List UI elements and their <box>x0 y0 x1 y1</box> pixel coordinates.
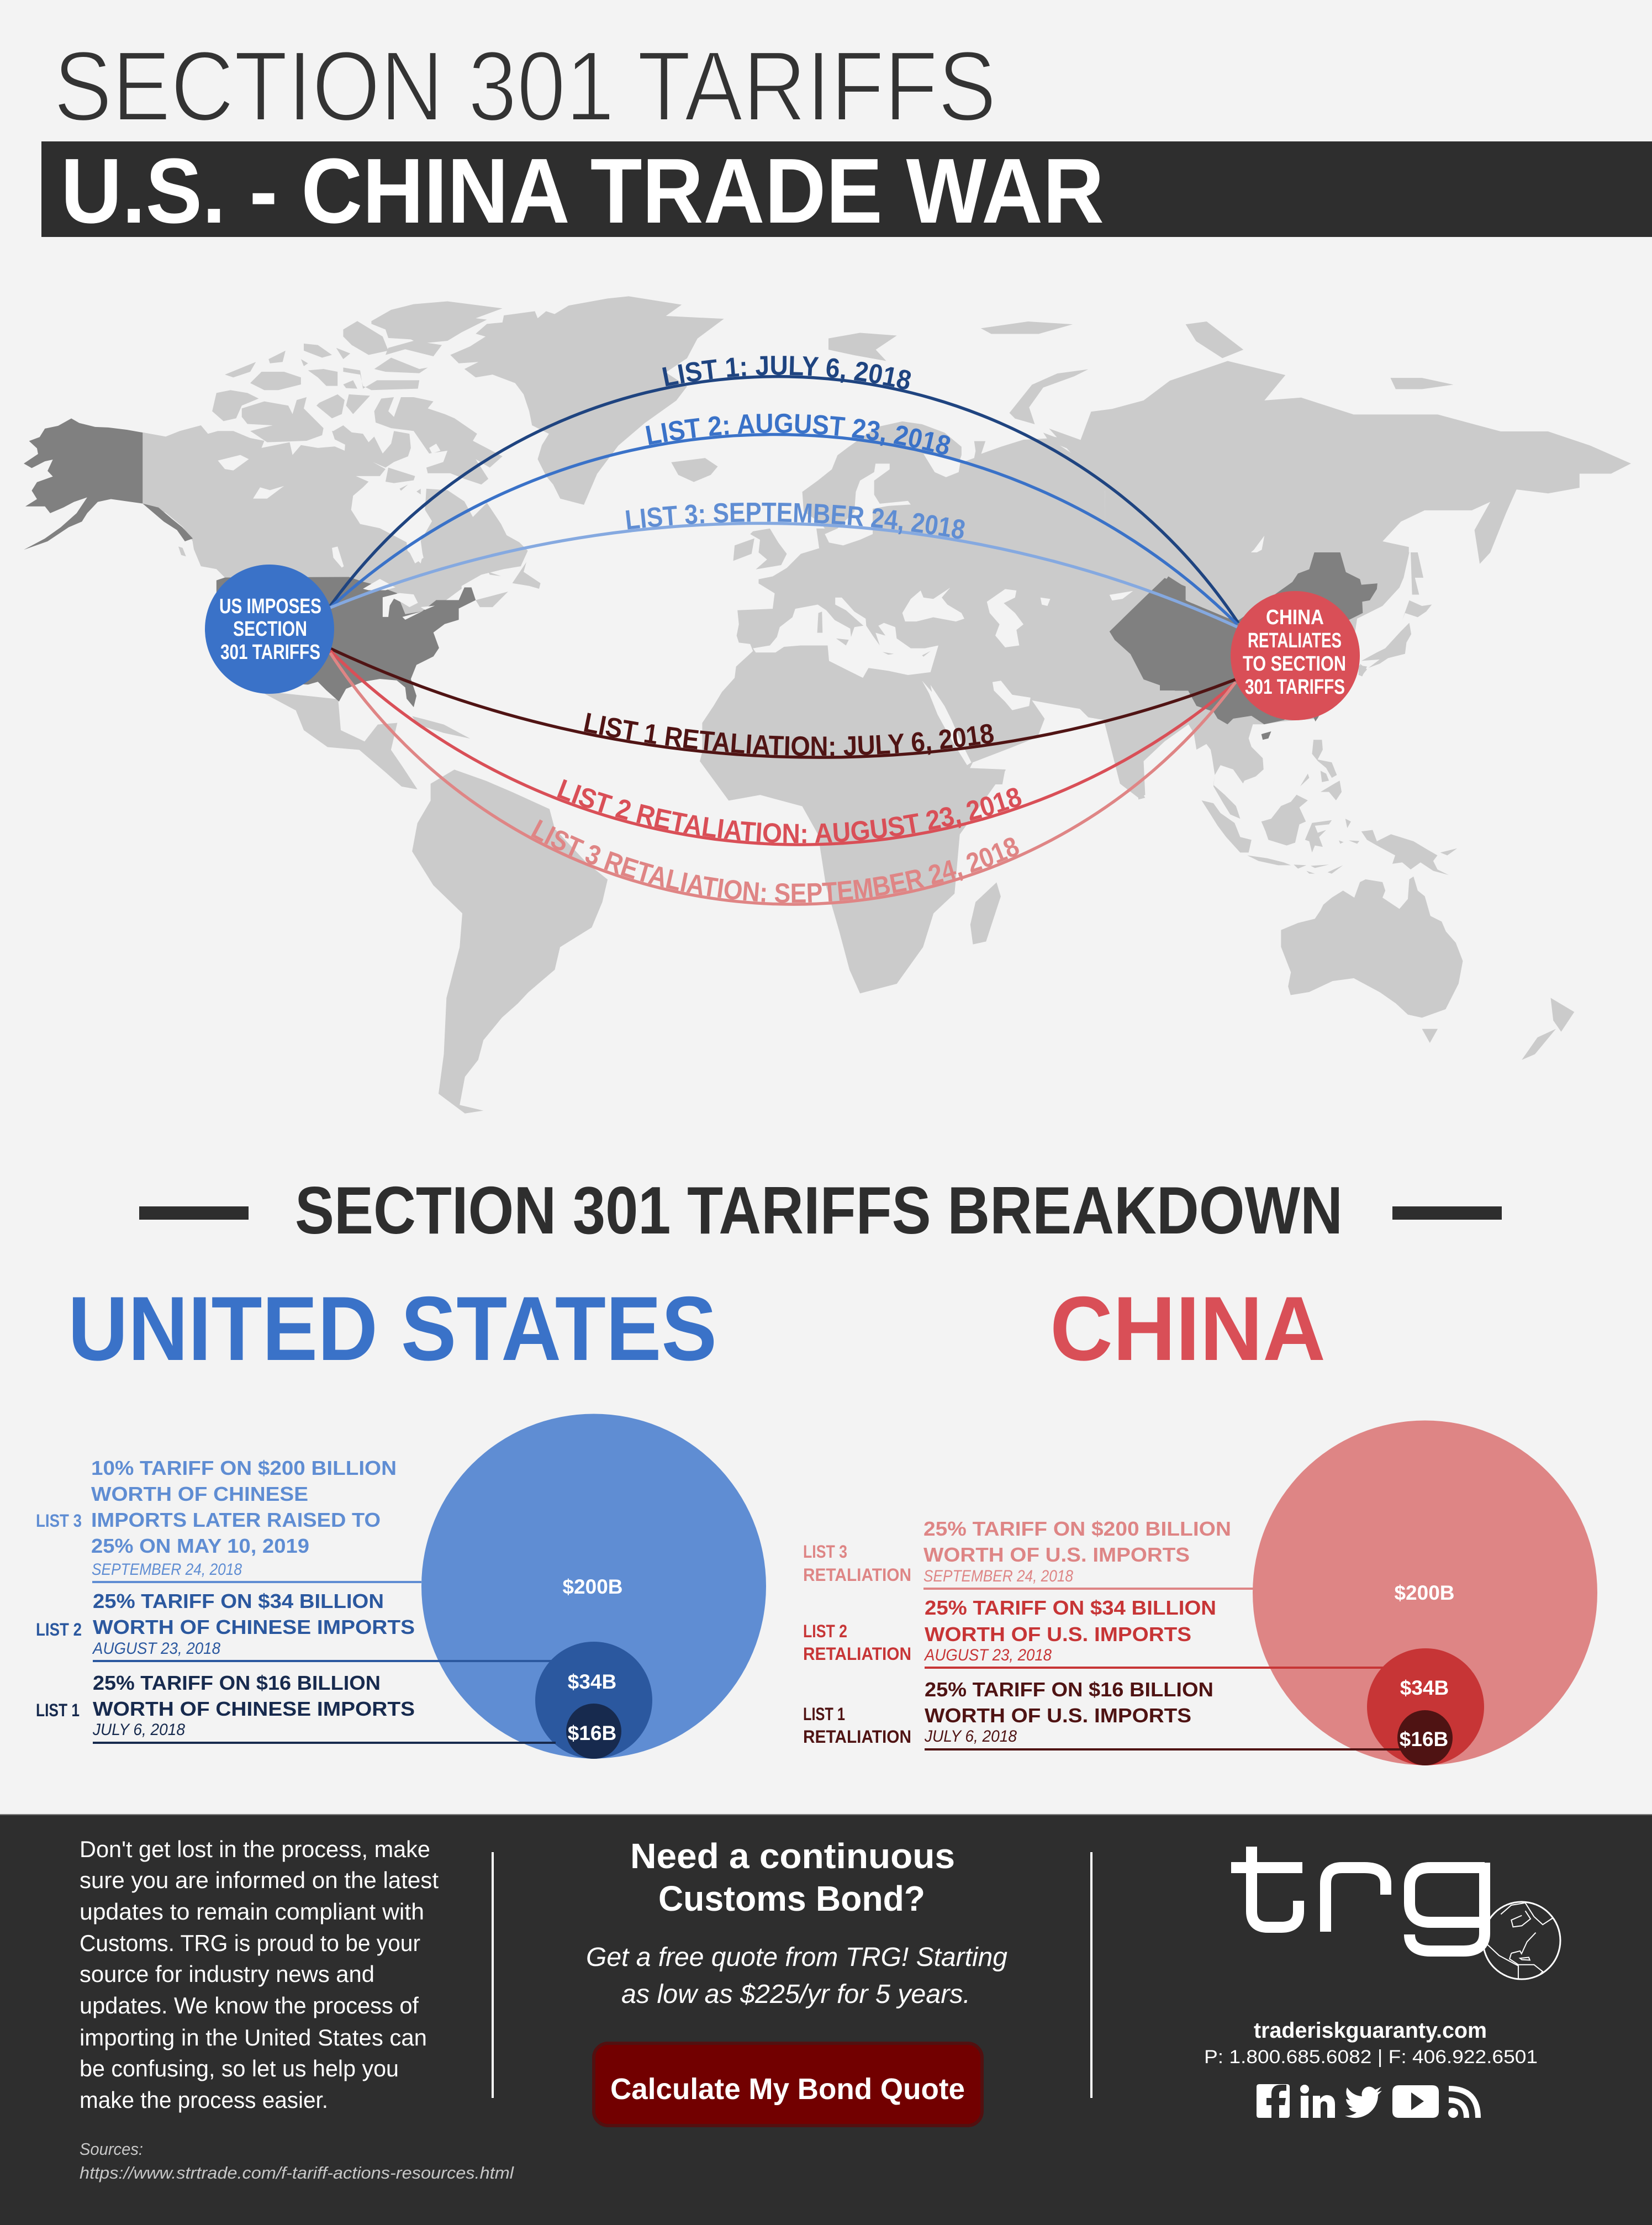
icon: youtube <box>1392 2085 1439 2118</box>
footer text block: source for industry news and <box>80 1961 374 1987</box>
arc: list 3 retaliation <box>329 652 1237 906</box>
callout: us imposes tariffs: SECTION <box>233 618 307 641</box>
footer text block: Customs. TRG is proud to be your <box>80 1930 420 1956</box>
us list 2: LIST 2 <box>36 1620 82 1639</box>
us list 2: AUGUST 23, 2018 <box>92 1639 220 1658</box>
arc: list 2: LIST 2: AUGUST 23, 2018 <box>646 413 950 455</box>
website: traderiskguaranty.com <box>1254 2018 1487 2043</box>
arcs and labels <box>329 356 1239 906</box>
callout: china retaliates: TO SECTION <box>1243 652 1346 676</box>
map: contiguous united states <box>217 577 476 707</box>
china list 3: WORTH OF U.S. IMPORTS <box>923 1543 1190 1566</box>
sources: Sources: <box>80 2139 143 2159</box>
china list 3 <box>803 1517 1253 1590</box>
us list 3: IMPORTS LATER RAISED TO <box>91 1509 381 1531</box>
panel: united states breakdown <box>36 1414 766 1759</box>
icon: facebook <box>1257 2084 1290 2118</box>
china list 3: SEPTEMBER 24, 2018 <box>923 1567 1073 1585</box>
callout: us imposes tariffs: US IMPOSES <box>219 595 321 618</box>
china list 2: WORTH OF U.S. IMPORTS <box>925 1623 1191 1646</box>
social icons <box>1257 2084 1478 2118</box>
china list 3: RETALIATION <box>803 1565 911 1585</box>
china list 3: 25% TARIFF ON $200 BILLION <box>923 1517 1231 1540</box>
us list 2 <box>36 1590 553 1662</box>
call to action text: Get a free quote from TRG! Starting <box>586 1943 1007 1972</box>
call to action heading: Customs Bond? <box>658 1879 925 1918</box>
us list 1: WORTH OF CHINESE IMPORTS <box>93 1697 415 1720</box>
icon: rss <box>1448 2089 1478 2118</box>
button: calculate bond quote <box>594 2043 982 2126</box>
china list 2: RETALIATION <box>803 1644 911 1664</box>
heading: breakdown: SECTION 301 TARIFFS BREAKDOWN <box>295 1173 1343 1248</box>
footer text block: Don't get lost in the process, make <box>80 1836 430 1862</box>
china list 2: 25% TARIFF ON $34 BILLION <box>925 1596 1216 1619</box>
logo: trg <box>1231 1847 1560 1979</box>
map: canada, arctic and greenland <box>142 296 724 620</box>
us list 1: 25% TARIFF ON $16 BILLION <box>93 1672 381 1694</box>
nested circle chart: us: $16B <box>568 1722 616 1744</box>
sources: https://www.strtrade.com/f-tariff-actions-resources.html <box>80 2163 514 2182</box>
us list 3: 10% TARIFF ON $200 BILLION <box>91 1457 397 1479</box>
map: china <box>1110 552 1377 740</box>
us list 3: SEPTEMBER 24, 2018 <box>92 1560 242 1579</box>
nested circle chart: us <box>421 1414 766 1759</box>
footer text block: importing in the United States can <box>80 2024 427 2050</box>
title band: U.S. - CHINA TRADE WAR <box>61 140 1104 242</box>
china list 1: WORTH OF U.S. IMPORTS <box>925 1704 1191 1727</box>
call to action heading <box>630 1836 955 1918</box>
us list 2: 25% TARIFF ON $34 BILLION <box>93 1590 384 1612</box>
arc: list 1 <box>329 356 1239 623</box>
us list 1 <box>36 1672 556 1744</box>
map: north asia, india and southern africa <box>700 321 1631 1060</box>
arc: list 3 retaliation: LIST 3 RETALIATION: SEPTEMBER 24, 2018 <box>531 820 1019 903</box>
map: east asia, southeast asia and australia <box>1160 552 1463 1017</box>
china list 1: LIST 1 <box>803 1704 845 1724</box>
sources <box>80 2139 514 2182</box>
callout: us imposes tariffs <box>205 565 334 694</box>
china list 2: AUGUST 23, 2018 <box>923 1646 1052 1664</box>
callout: china retaliates: 301 TARIFFS <box>1245 676 1345 699</box>
icon: globe <box>1483 1902 1560 1979</box>
callout: china retaliates: RETALIATES <box>1248 629 1342 652</box>
nested circle chart: china <box>1253 1421 1597 1765</box>
china list 1: RETALIATION <box>803 1727 911 1747</box>
map: europe, north africa and middle east <box>671 369 1105 784</box>
footer panel <box>0 1814 1652 2225</box>
panel: china breakdown <box>803 1421 1597 1765</box>
us list 3: 25% ON MAY 10, 2019 <box>91 1535 309 1557</box>
footer text block: updates. We know the process of <box>80 1992 419 2018</box>
heading: china: CHINA <box>1050 1278 1326 1379</box>
china list 1: JULY 6, 2018 <box>924 1727 1017 1746</box>
icon: twitter <box>1345 2086 1382 2118</box>
china list 1 <box>803 1678 1401 1751</box>
nested circle chart: china: $34B <box>1400 1676 1449 1699</box>
arc: list 1 retaliation <box>330 647 1236 759</box>
us list 1: JULY 6, 2018 <box>92 1721 185 1739</box>
button: calculate bond quote: Calculate My Bond Quote <box>610 2073 965 2106</box>
china list 2: LIST 2 <box>803 1621 847 1641</box>
callout: china retaliates <box>1231 591 1360 720</box>
map: central and south america <box>24 419 608 1114</box>
footer text block: be confusing, so let us help you <box>80 2055 399 2081</box>
china list 2 <box>803 1596 1384 1669</box>
us list 1: LIST 1 <box>36 1700 80 1720</box>
arc: list 2 retaliation: LIST 2 RETALIATION: AUGUST 23, 2018 <box>557 779 1022 843</box>
footer text block: updates to remain compliant with <box>80 1899 424 1925</box>
callout: china retaliates: CHINA <box>1266 606 1324 629</box>
us list 3: LIST 3 <box>36 1511 82 1531</box>
call to action text <box>586 1943 1007 2009</box>
world map <box>24 296 1631 1114</box>
call to action heading: Need a continuous <box>630 1836 955 1876</box>
us list 2: WORTH OF CHINESE IMPORTS <box>93 1616 415 1638</box>
call to action text: as low as $225/yr for 5 years. <box>621 1980 970 2009</box>
arc: list 2 retaliation <box>330 650 1232 846</box>
nested circle chart: china: $16B <box>1400 1728 1448 1751</box>
arc: list 1 retaliation: LIST 1 RETALIATION: JULY 6, 2018 <box>584 713 994 756</box>
footer text block: sure you are informed on the latest <box>80 1867 439 1893</box>
callout: us imposes tariffs: 301 TARIFFS <box>220 641 320 664</box>
arc: list 1: LIST 1: JULY 6, 2018 <box>662 356 911 389</box>
arc: list 3 <box>330 503 1238 629</box>
us list 3: WORTH OF CHINESE <box>91 1483 308 1505</box>
nested circle chart: us: $200B <box>562 1575 623 1598</box>
heading: united states: UNITED STATES <box>68 1278 717 1379</box>
phone and fax: P: 1.800.685.6082 | F: 406.922.6501 <box>1204 2047 1538 2068</box>
title: SECTION 301 TARIFFS <box>54 31 996 142</box>
arc: list 3: LIST 3: SEPTEMBER 24, 2018 <box>625 503 965 539</box>
china list 1: 25% TARIFF ON $16 BILLION <box>925 1678 1213 1701</box>
footer text block: make the process easier. <box>80 2087 328 2113</box>
footer text block <box>80 1836 439 2113</box>
icon: linkedin <box>1300 2085 1335 2118</box>
arc: list 2 <box>330 413 1238 625</box>
nested circle chart: china: $200B <box>1394 1581 1455 1604</box>
us list 3 <box>36 1457 421 1583</box>
map: alaska <box>24 419 193 550</box>
nested circle chart: us: $34B <box>568 1670 616 1693</box>
china list 3: LIST 3 <box>803 1542 847 1562</box>
